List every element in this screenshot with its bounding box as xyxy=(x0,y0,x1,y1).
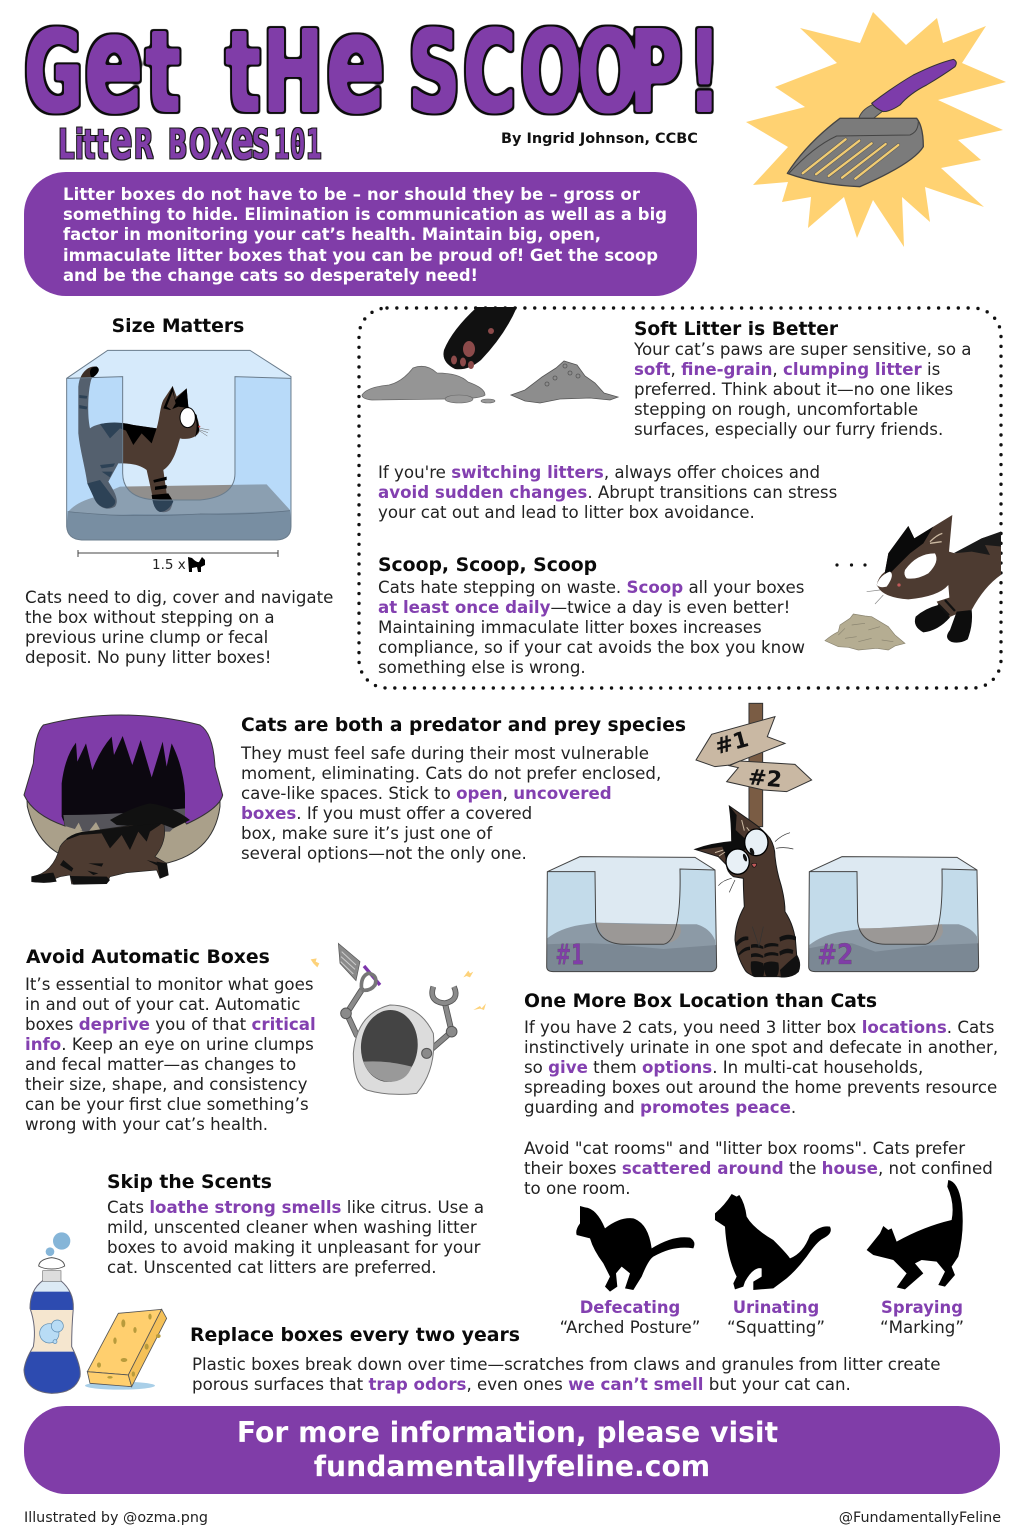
icon: robot litter box xyxy=(311,943,486,1094)
panel: replace boxes: porous surfaces that trap odors, even ones we can’t smell but your cat can. xyxy=(192,1375,851,1394)
panel: replace boxes: Plastic boxes break down over time—scratches from claws and granules from litter create xyxy=(192,1355,941,1374)
icon: litter scoop on yellow burst xyxy=(746,12,1006,247)
text: automatic boxes: and fecal matter—as changes to xyxy=(25,1055,296,1074)
panel: replace boxes: Replace boxes every two years xyxy=(190,1325,520,1346)
panel: litter and scooping dotted box xyxy=(359,307,1003,688)
cat silhouettes xyxy=(576,1180,963,1292)
icon: cat sniffing dirty litter xyxy=(825,515,1003,650)
text: size matters: Cats need to dig, cover and navigate xyxy=(25,588,333,607)
signpost: #1 xyxy=(712,727,751,760)
text: predator and prey: cave-like spaces. Stick to open, uncovered xyxy=(241,784,612,803)
panel: one more box than cats: One More Box Location than Cats xyxy=(524,991,877,1012)
text: soft litter: preferred. Think about it—no one likes xyxy=(634,380,953,399)
text: switching litters: If you're switching litters, always offer choices and xyxy=(378,463,820,482)
text: automatic boxes xyxy=(25,947,316,1134)
text: predator and prey: several options—not the only one. xyxy=(241,844,527,863)
text: soft litter: stepping on rough, uncomfortable xyxy=(634,400,918,419)
dotted border xyxy=(359,308,1001,688)
text: scoop: Maintaining immaculate litter boxes increases xyxy=(378,618,762,637)
box 1 xyxy=(547,857,717,972)
posture labels: “Squatting” xyxy=(727,1318,825,1337)
icon: cleaner bottle and sponge xyxy=(20,1232,167,1395)
panel: skip the scents xyxy=(20,1172,484,1395)
panel: one more box than cats: instinctively urinate in one spot and defecate in another, xyxy=(524,1038,998,1057)
panel: one more box than cats: to one room. xyxy=(524,1179,631,1198)
footer banner: For more information, please visit xyxy=(237,1416,778,1449)
text: soft litter: surfaces, especially our furry friends. xyxy=(634,420,943,439)
text: soft litter: Your cat’s paws are super sensitive, so a xyxy=(633,340,972,359)
panel: size matters xyxy=(25,316,333,667)
box 2 xyxy=(809,857,979,972)
panel: one more box than cats: spreading boxes out around the home prevents resource xyxy=(524,1078,997,1097)
icon: cat entering covered box xyxy=(24,715,223,885)
signpost xyxy=(696,703,812,827)
posture labels: “Arched Posture” xyxy=(560,1318,700,1337)
text: soft litter xyxy=(633,319,972,439)
heading: size matters: Size Matters xyxy=(112,316,244,337)
panel: one more box than cats: so give them options. In multi-cat households, xyxy=(524,1058,923,1077)
text: predator and prey: moment, eliminating. Cats do not prefer enclosed, xyxy=(241,764,661,783)
illustration: cat standing in big box xyxy=(67,350,291,540)
intro banner: and be the change cats so desperately need! xyxy=(63,266,478,285)
text: automatic boxes: their size, shape, and consistency xyxy=(25,1075,308,1094)
intro banner: something to hide. Elimination is communication as well as a big xyxy=(63,205,667,224)
posture labels xyxy=(560,1298,964,1337)
text: scoop: at least once daily—twice a day is even better! xyxy=(378,598,790,617)
text: switching litters: your cat out and lead to litter box avoidance. xyxy=(378,503,755,522)
text: scoop: Cats hate stepping on waste. Scoop all your boxes xyxy=(378,578,804,597)
text: predator and prey: Cats are both a predator and prey species xyxy=(241,715,686,736)
text: scoop: compliance, so if your cat avoids the box you know xyxy=(378,638,805,657)
text: automatic boxes: boxes deprive you of that critical xyxy=(25,1015,316,1034)
text: predator and prey: They must feel safe during their most vulnerable xyxy=(240,744,649,763)
text: switching litters: avoid sudden changes. Abrupt transitions can stress xyxy=(378,483,837,502)
intro banner: immaculate litter boxes that you can be proud of! Get the scoop xyxy=(63,246,658,265)
text: scoop: something else is wrong. xyxy=(378,658,586,677)
panel: one more box than cats xyxy=(524,991,998,1198)
text: automatic boxes: Avoid Automatic Boxes xyxy=(26,947,270,968)
panel: replace boxes xyxy=(190,1325,941,1394)
signpost: #2 xyxy=(747,765,783,793)
panel: one more box than cats: their boxes scattered around the house, not confined xyxy=(524,1159,993,1178)
credit: social handle: @FundamentallyFeline xyxy=(839,1510,1001,1526)
measurement: 1.5 x cat length xyxy=(78,550,278,573)
icon: cat looking at the signs xyxy=(695,806,800,977)
box 1: #1 xyxy=(555,938,584,971)
text: predator and prey xyxy=(240,715,686,863)
text: skip the scents: Skip the Scents xyxy=(107,1172,272,1193)
panel: one more box than cats: Avoid "cat rooms" and "litter box rooms". Cats prefer xyxy=(524,1139,965,1158)
text: size matters xyxy=(25,588,333,667)
panel: avoid automatic boxes xyxy=(25,943,486,1134)
text: size matters: previous urine clump or fecal xyxy=(25,628,268,647)
measurement: 1.5 x cat length: 1.5 x xyxy=(152,557,186,573)
text: size matters: deposit. No puny litter boxes! xyxy=(25,648,271,667)
intro banner: factor in monitoring your cat’s health. Maintain big, open, xyxy=(63,225,601,244)
panel: elimination postures xyxy=(560,1180,964,1337)
intro banner xyxy=(24,172,697,296)
icon: paw and litter mounds xyxy=(362,307,618,403)
text: soft litter: soft, fine-grain, clumping litter is xyxy=(634,360,940,379)
text: skip the scents: cat. Unscented cat litters are preferred. xyxy=(107,1258,437,1277)
text: skip the scents xyxy=(107,1172,484,1277)
text: scoop: Scoop, Scoop, Scoop xyxy=(378,555,597,576)
text: automatic boxes: wrong with your cat’s health. xyxy=(25,1115,268,1134)
panel: one more box than cats: If you have 2 cats, you need 3 litter box locations. Cats xyxy=(524,1018,994,1037)
text: skip the scents: mild, unscented cleaner when washing litter xyxy=(107,1218,477,1237)
text: predator and prey: box, make sure it’s just one of xyxy=(241,824,493,843)
panel: location illustration xyxy=(547,703,979,977)
panel: predator and prey xyxy=(24,715,686,885)
text: scoop xyxy=(378,555,805,677)
credit: illustrator: Illustrated by @ozma.png xyxy=(24,1510,208,1526)
text: skip the scents: boxes to avoid making it unpleasant for your xyxy=(107,1238,481,1257)
text: automatic boxes: can be your first clue something’s xyxy=(25,1095,309,1114)
subtitle: LitteR BOXeS 101 xyxy=(58,108,322,172)
posture labels: Urinating xyxy=(733,1298,819,1317)
text: skip the scents: Cats loathe strong smells like citrus. Use a xyxy=(107,1198,484,1217)
text: switching litters xyxy=(378,463,837,522)
byline: By Ingrid Johnson, CCBC xyxy=(501,131,698,147)
posture labels: Spraying xyxy=(881,1298,963,1317)
panel: one more box than cats: guarding and promotes peace. xyxy=(524,1098,796,1117)
text: automatic boxes: in and out of your cat. Automatic xyxy=(25,995,300,1014)
footer banner: fundamentallyfeline.com xyxy=(314,1450,710,1483)
text: automatic boxes: It’s essential to monitor what goes xyxy=(25,975,314,994)
text: predator and prey: boxes. If you must offer a covered xyxy=(241,804,532,823)
text: automatic boxes: info. Keep an eye on urine clumps xyxy=(25,1035,314,1054)
posture labels: “Marking” xyxy=(880,1318,964,1337)
footer banner xyxy=(24,1406,1000,1494)
text: soft litter: Soft Litter is Better xyxy=(634,319,839,340)
box 2: #2 xyxy=(817,938,853,971)
intro banner: Litter boxes do not have to be – nor should they be – gross or xyxy=(63,185,641,204)
text: size matters: the box without stepping on a xyxy=(25,608,275,627)
posture labels: Defecating xyxy=(580,1298,680,1317)
